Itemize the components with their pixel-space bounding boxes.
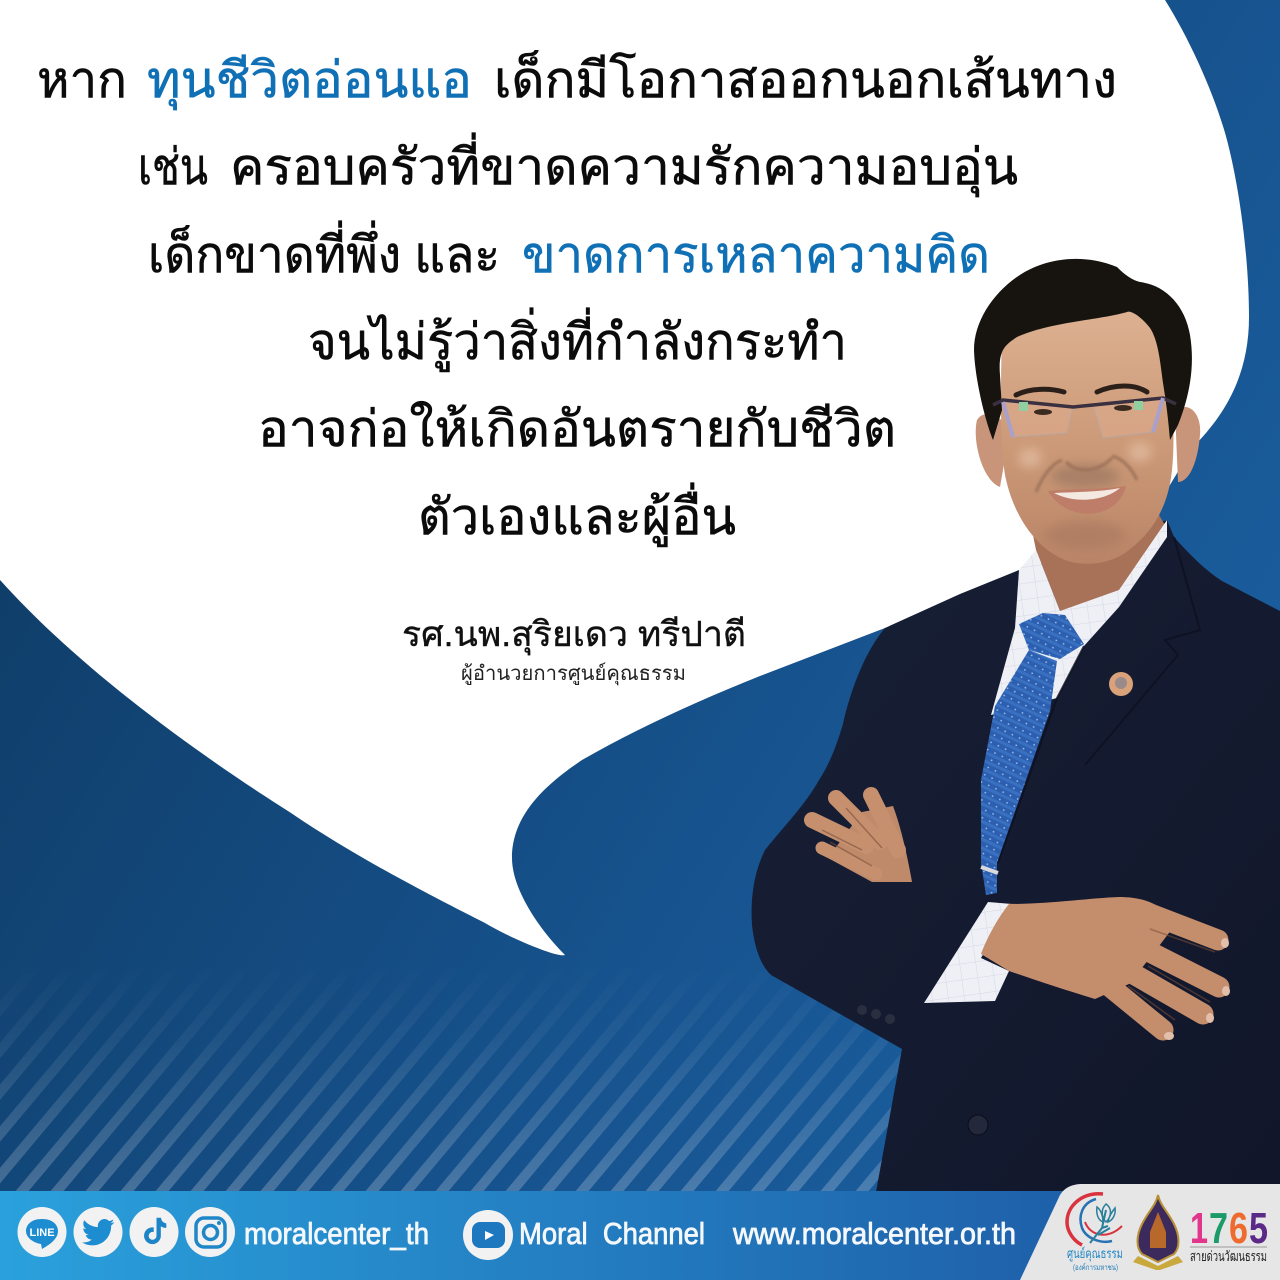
icon: YouTube [463, 1210, 513, 1260]
cheek highlights [1018, 442, 1152, 549]
logo: moral center: ศูนย์คุณธรรม [1067, 1246, 1123, 1262]
line 1: หาก [37, 52, 127, 108]
sleeve buttons [857, 1005, 895, 1024]
social handle: moralcenter_th [244, 1216, 429, 1251]
nose and smile lines [1036, 456, 1137, 492]
logo: culture emblem [1133, 1195, 1183, 1270]
line 2: เช่น [138, 139, 208, 195]
hair [974, 259, 1192, 440]
logo: 1765 hotline [1190, 1204, 1268, 1264]
neck [1030, 500, 1165, 611]
logo: 1765 hotline: 6 [1229, 1204, 1248, 1253]
ears [976, 407, 1200, 487]
icon: TikTok [130, 1207, 178, 1257]
glasses [993, 398, 1176, 438]
logo panel [1020, 1184, 1280, 1280]
line 3 [148, 221, 990, 283]
line 2: ครอบครัวที่ขาดความรักความอบอุ่น [230, 133, 1018, 197]
logo: moral center: (องค์การมหาชน) [1073, 1262, 1118, 1272]
head [974, 259, 1200, 564]
footer bar [0, 1191, 1080, 1280]
website: www.moralcenter.or.th [732, 1216, 1016, 1251]
lapel pin [1109, 672, 1133, 696]
jacket button [968, 1115, 988, 1135]
logo: 1765 hotline: 7 [1209, 1204, 1228, 1253]
line 1: เด็กมีโอกาสออกนอกเส้นทาง [494, 50, 1117, 108]
author name: รศ.นพ.สุริยเดว ทรีปาตี [402, 615, 746, 655]
lapel lines [998, 537, 1200, 863]
channel name: Moral Channel [519, 1216, 705, 1251]
line 1 [37, 50, 1117, 110]
eyebrows [1016, 386, 1147, 395]
logo: 1765 hotline: 1 [1190, 1204, 1208, 1253]
logo: 1765 hotline: 5 [1249, 1204, 1268, 1253]
logo: moral center [1067, 1194, 1123, 1272]
line 3: ขาดการเหลาความคิด [522, 227, 990, 283]
tie [981, 613, 1084, 895]
forearm and hand [981, 897, 1230, 1040]
smile [1048, 486, 1126, 514]
speech bubble [0, 0, 1249, 955]
author title: ผู้อำนวยการศูนย์คุณธรรม [461, 662, 686, 686]
icon: LINE: LINE [29, 1227, 55, 1239]
face [1001, 295, 1174, 564]
icon: Instagram [185, 1207, 235, 1257]
shirt collar [991, 520, 1167, 715]
line 3: เด็กขาดที่พึ่ง และ [148, 221, 500, 283]
suit [752, 520, 1280, 1192]
line 4: จนไม่รู้ว่าสิ่งที่กำลังกระทำ [308, 308, 847, 372]
icon: Twitter [74, 1207, 122, 1257]
portrait of the speaker [752, 259, 1280, 1192]
shirt cuff [924, 902, 1012, 1003]
icon: LINE [18, 1207, 66, 1257]
tucked hand [812, 795, 912, 882]
line 6: ตัวเองและผู้อื่น [418, 483, 736, 547]
line 1: ทุนชีวิตอ่อนแอ [147, 52, 472, 110]
diagonal stripes [0, 1011, 901, 1191]
quote text [37, 50, 1117, 547]
line 5: อาจก่อให้เกิดอันตรายกับชีวิต [258, 401, 896, 457]
